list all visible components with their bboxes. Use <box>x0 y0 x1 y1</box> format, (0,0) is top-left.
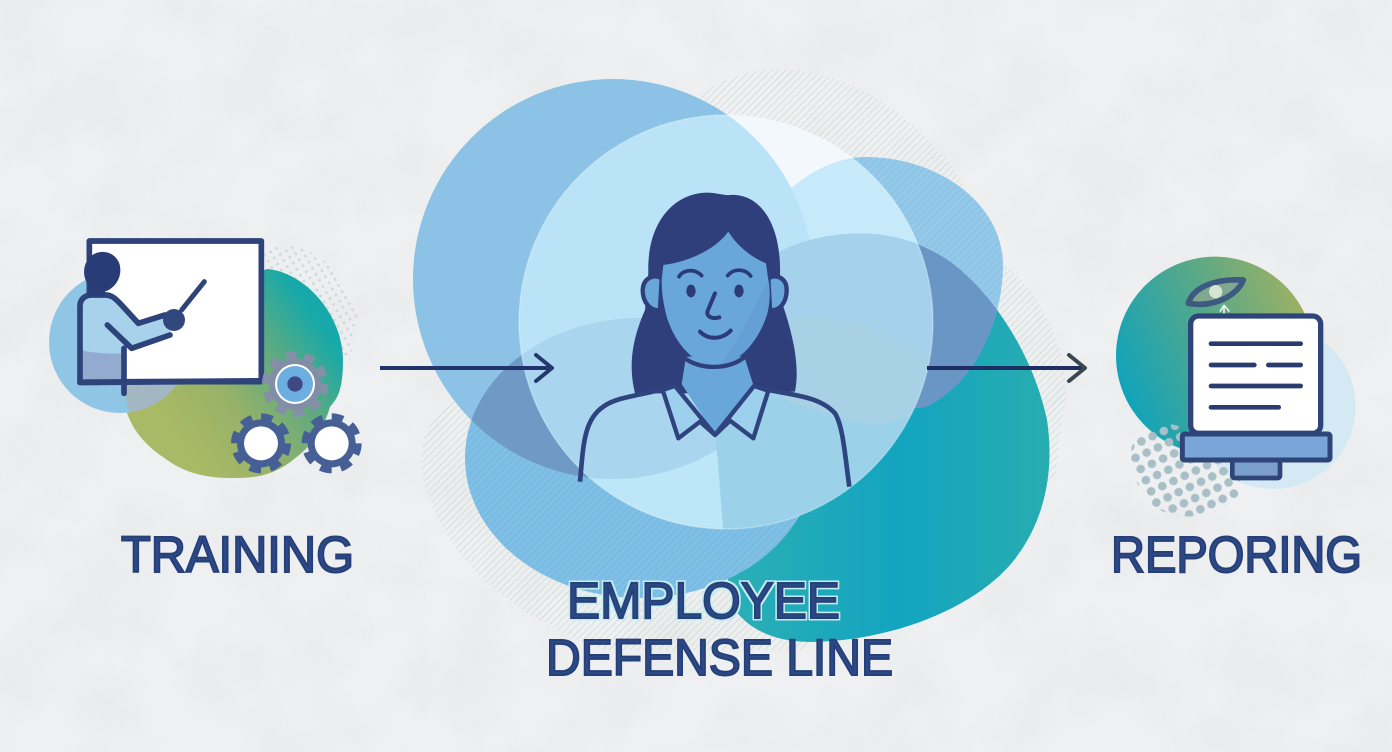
ellipse and circle overlap <box>472 355 589 478</box>
main: middle band <box>760 318 935 423</box>
gear right <box>306 417 358 469</box>
icon: employee portrait <box>580 193 849 487</box>
ears <box>643 276 787 310</box>
presenter head <box>84 252 120 297</box>
main: teal tint <box>716 234 933 529</box>
eye icon <box>1188 280 1243 315</box>
presenter hand <box>163 309 185 331</box>
shoulders <box>580 389 849 487</box>
laptop base <box>1182 434 1330 460</box>
blue and green overlap <box>125 384 177 412</box>
neck <box>682 357 753 435</box>
main: ellipse upper overlap <box>522 318 716 479</box>
heading: training: TRAINING <box>121 526 354 583</box>
arrow: training to employee <box>380 355 552 381</box>
face <box>662 232 770 365</box>
collar <box>663 386 768 438</box>
gear left <box>235 417 287 469</box>
presenter body <box>80 295 172 382</box>
green blob <box>127 269 343 478</box>
report text lines <box>1211 344 1301 407</box>
hatch texture behind training blob <box>262 246 358 360</box>
heading: reporting: REPORING <box>1111 526 1362 583</box>
nose <box>707 293 719 318</box>
laptop stand <box>1232 459 1280 478</box>
report screen <box>1191 316 1321 433</box>
teal circle <box>1116 257 1314 455</box>
hair <box>632 193 797 393</box>
main circle <box>519 115 933 529</box>
pointer <box>182 282 204 310</box>
halftone dots <box>1131 424 1240 516</box>
main: upper left tint <box>519 115 809 354</box>
defense line text: DEFENSE LINE <box>546 629 893 686</box>
light circle <box>1191 324 1356 489</box>
main circle base <box>519 115 933 529</box>
upper left circle <box>413 79 813 479</box>
main: top right light <box>791 158 933 400</box>
board ledge <box>80 381 260 382</box>
panel: training icon <box>49 241 358 478</box>
arrow: employee to reporting <box>927 355 1085 381</box>
teal blob <box>716 234 1049 642</box>
mouth <box>700 331 731 338</box>
top right blob <box>775 157 1003 408</box>
hatched backdrop <box>422 69 1065 650</box>
lower left ellipse <box>465 318 815 598</box>
main: upper right tint <box>779 234 932 354</box>
panel: central overlapping circles <box>413 69 1065 650</box>
presenter <box>80 252 204 393</box>
whiteboard <box>89 241 261 382</box>
heading: employee defense line <box>546 572 893 686</box>
panel: reporting icon <box>1116 257 1356 516</box>
eyes <box>686 285 696 297</box>
eyebrows <box>679 270 751 277</box>
blue circle <box>49 271 191 413</box>
employee line: EMPLOYEE <box>567 572 840 629</box>
gear grey <box>267 356 323 412</box>
main: ellipse light <box>590 450 777 529</box>
chin line <box>685 357 745 367</box>
teal and blob overlap <box>914 244 997 408</box>
